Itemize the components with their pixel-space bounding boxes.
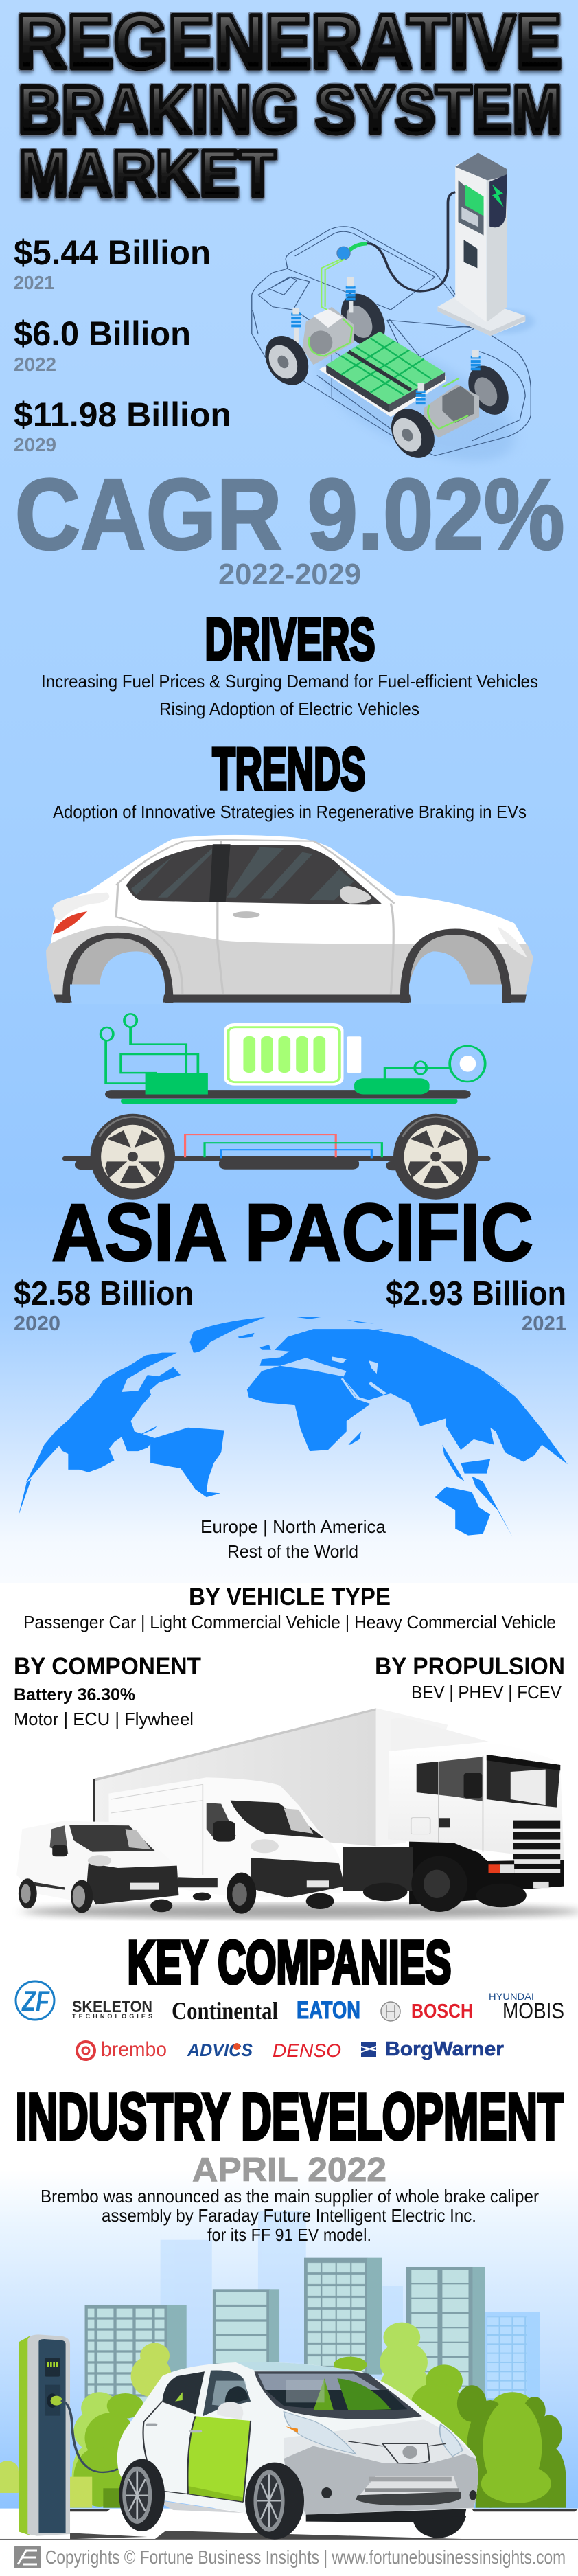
logo: ZF: ZF	[21, 1985, 50, 2017]
illustration: city with EV charging	[0, 2211, 578, 2540]
stat: 2029 market value	[14, 396, 231, 455]
segment: by propulsion: BEV | PHEV | FCEV	[411, 1682, 562, 1702]
illustration: white car side view	[46, 835, 533, 1004]
drivers text: Increasing Fuel Prices & Surging Demand for Fuel-efficient Vehicles	[41, 671, 538, 692]
logo: Hyundai Mobis: HYUNDAI	[489, 1991, 534, 2002]
drivers text: Rising Adoption of Electric Vehicles	[159, 698, 419, 719]
segment: by component: Motor | ECU | Flywheel	[14, 1709, 194, 1729]
logo: Bosch	[381, 2001, 473, 2022]
development text: for its FF 91 EV model.	[207, 2224, 371, 2245]
other regions: Rest of the World	[227, 1541, 358, 1562]
segment: by component	[14, 1653, 201, 1729]
segment: by vehicle type: Passenger Car | Light Commercial Vehicle | Heavy Commercial Vehicle	[23, 1612, 556, 1632]
stat: 2021 market value: 2021	[14, 272, 54, 293]
stat: Asia Pacific 2021: 2021	[522, 1311, 566, 1335]
footer copyright	[0, 2540, 578, 2576]
illustration: EV chassis and charging station	[252, 152, 537, 485]
development text: Brembo was announced as the main supplier of whole brake caliper	[41, 2186, 539, 2207]
segment: by propulsion	[375, 1653, 565, 1702]
logo: Denso: DENSO	[273, 2040, 341, 2061]
heading: trends: TRENDS	[213, 736, 365, 802]
logo: Skeleton Technologies: TECHNOLOGIES	[72, 2013, 152, 2020]
world map	[19, 1317, 568, 1537]
logo: Hyundai Mobis: MOBIS	[502, 1998, 564, 2023]
illustration: EV charger	[19, 2334, 118, 2536]
heading: Asia Pacific: ASIA PACIFIC	[51, 1187, 533, 1278]
logo: Hyundai Mobis	[489, 1991, 564, 2023]
footer logo	[14, 2546, 41, 2568]
development text	[41, 2186, 539, 2245]
other regions: Europe | North America	[200, 1516, 386, 1537]
segment: by vehicle type	[23, 1584, 556, 1632]
logo: Brembo: brembo	[101, 2038, 167, 2061]
stat: 2022 market value: $6.0 Billion	[14, 315, 191, 353]
other regions	[200, 1516, 386, 1562]
title	[16, 0, 562, 210]
logo: BorgWarner: BorgWarner	[385, 2038, 504, 2060]
stat: 2022 market value	[14, 315, 191, 375]
segment: by vehicle type: BY VEHICLE TYPE	[189, 1584, 391, 1610]
stat: 2029 market value: $11.98 Billion	[14, 396, 231, 434]
logo: Bosch: BOSCH	[411, 2001, 473, 2022]
stat: Asia Pacific 2020: $2.58 Billion	[14, 1275, 194, 1312]
illustration: EV platform with battery and circuit	[62, 1014, 491, 1200]
date: APRIL 2022	[192, 2152, 386, 2189]
illustration: electric car	[117, 2362, 478, 2540]
trends text: Adoption of Innovative Strategies in Regenerative Braking in EVs	[53, 801, 527, 822]
stat: 2022 market value: 2022	[14, 354, 56, 375]
stat: Asia Pacific 2021: $2.93 Billion	[386, 1275, 566, 1312]
stat: Asia Pacific 2021	[386, 1275, 566, 1335]
segment: by propulsion: BY PROPULSION	[375, 1653, 565, 1680]
development text: assembly by Faraday Future Intelligent Electric Inc.	[102, 2205, 476, 2226]
stat: 2021 market value	[14, 233, 211, 293]
logo: Continental: Continental	[172, 1997, 278, 2025]
segment: by component: Battery 36.30%	[14, 1685, 135, 1705]
segment: by component: BY COMPONENT	[14, 1653, 201, 1680]
drivers text	[41, 671, 538, 719]
stat: Asia Pacific 2020	[14, 1275, 194, 1335]
stat: 2029 market value: 2029	[14, 434, 56, 455]
heading: drivers: DRIVERS	[205, 607, 375, 673]
logo: Advics: ADVICS	[187, 2040, 253, 2060]
title: MARKET	[19, 137, 276, 210]
logo: ZF	[16, 1981, 54, 2020]
stat: 2021 market value: $5.44 Billion	[14, 233, 211, 272]
CAGR period: 2022-2029	[218, 558, 361, 591]
stat: Asia Pacific 2020: 2020	[14, 1311, 60, 1335]
illustration: commercial vehicles	[16, 1708, 578, 1919]
logo: Skeleton Technologies: SKELETON	[72, 1998, 152, 2016]
logo: Eaton: EATON	[297, 1997, 360, 2024]
